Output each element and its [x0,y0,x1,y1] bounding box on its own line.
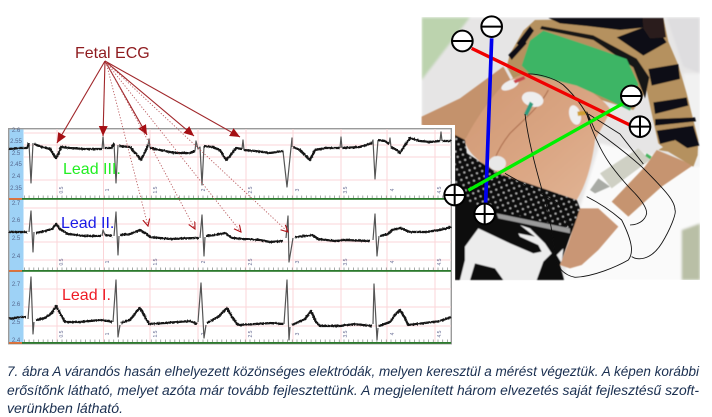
x axis labels [59,186,443,337]
x axis labels: 3.5 [343,330,349,337]
x axis labels: 2.5 [248,330,254,337]
lead III vector (green) [468,103,623,190]
black band around top [540,26,649,98]
green top [522,31,638,111]
dotted waistband [455,135,581,228]
black stripes [508,18,699,149]
linea nigra [495,90,548,158]
caption: verünkben látható. [7,401,123,416]
lead II vector (blue) [486,38,492,203]
panel: ECG recording [0,125,455,350]
hand [560,208,618,268]
lead separators [9,198,451,344]
x axis labels: 3 [295,332,301,335]
tick marks [24,197,451,341]
x axis labels: 1.5 [153,258,159,265]
x axis labels: 2.5 [248,186,254,193]
electrode: minus, lead I [452,31,473,51]
trace: lead II [9,211,451,262]
y axis labels [10,128,22,344]
x axis labels: 4.5 [437,258,443,265]
y axis labels: 2.7 [12,282,21,288]
heading: Fetal ECG: Fetal ECG [75,45,150,62]
photo: pregnant abdomen with electrodes [422,17,700,280]
wires [505,74,675,277]
trace: lead III [9,132,451,187]
x axis labels: 4 [390,260,396,263]
electrode: plus, lead I [630,116,650,137]
electrode: plus, lead II [474,204,495,224]
electrode: plus, lead III [444,185,465,205]
lead I vector (red) [472,48,631,125]
label: Lead III: Lead III. [63,161,121,178]
electrodes [520,89,545,109]
electrode: minus, lead III [621,86,642,106]
y axis labels: 2.7 [12,201,21,207]
belly [465,73,611,200]
y axis labels: 2.6 [12,302,21,308]
caption: 7. ábra A várandós hasán elhelyezett közönséges elektródák, melyen keresztül a mérést végeztük. A képen korábbi [7,364,700,379]
forearm [612,150,693,217]
x axis labels: 3 [295,260,301,263]
electrode: minus, lead II [481,16,502,37]
x axis labels: 0.5 [59,330,65,337]
trace: lead I [9,277,451,340]
x axis labels: 4 [390,188,396,191]
x axis labels: 2 [201,332,207,335]
x axis labels: 1 [105,188,111,191]
sweater cuff [658,140,698,167]
label: Lead I: Lead I. [62,287,111,304]
electrode clips [524,102,533,116]
x axis labels: 4.5 [437,186,443,193]
x axis labels: 4.5 [437,330,443,337]
caption: erősítőnk látható, melyet azóta már tovább fejlesztettünk. A megjelenített három elvezetés saját fejlesztésű szoft- [7,383,700,398]
y axis labels: 2.6 [12,218,21,224]
x axis labels: 3.5 [343,186,349,193]
x axis labels: 1.5 [153,330,159,337]
x axis labels: 1.5 [153,186,159,193]
y axis labels: 2.35 [10,186,22,192]
x axis labels: 2 [201,260,207,263]
y axis labels: 2.55 [10,139,22,145]
label: Lead II: Lead II. [61,215,114,232]
x axis labels: 2 [201,188,207,191]
y axis labels: 2.4 [12,254,21,260]
y axis labels: 2.5 [12,236,21,242]
x axis labels: 0.5 [59,186,65,193]
x axis labels: 3.5 [343,258,349,265]
x axis labels: 3 [295,188,301,191]
knitted band [497,213,570,233]
x axis labels: 1 [105,260,111,263]
arrows: dotted, to lead II fetal peaks [106,62,288,232]
lead vectors and electrode symbols [444,16,650,224]
sweater [507,18,698,167]
x axis labels: 2.5 [248,258,254,265]
pants [455,135,581,280]
x axis labels: 4 [390,332,396,335]
x axis labels: 1 [105,332,111,335]
y axis labels: 2.5 [12,151,21,157]
caption [7,364,700,416]
x axis labels: 0.5 [59,258,65,265]
device [600,148,650,188]
photo background sheets [422,17,700,280]
reindeer print [460,225,552,280]
y axis labels: 2.6 [12,128,21,134]
y axis labels: 2.5 [12,320,21,326]
y axis labels: 2.4 [12,338,21,344]
hair [643,18,666,38]
arrows: solid, to lead III fetal peaks [57,61,240,143]
y axis labels: 2.45 [10,162,22,168]
y axis labels: 2.4 [12,174,21,180]
left arm [422,67,515,142]
